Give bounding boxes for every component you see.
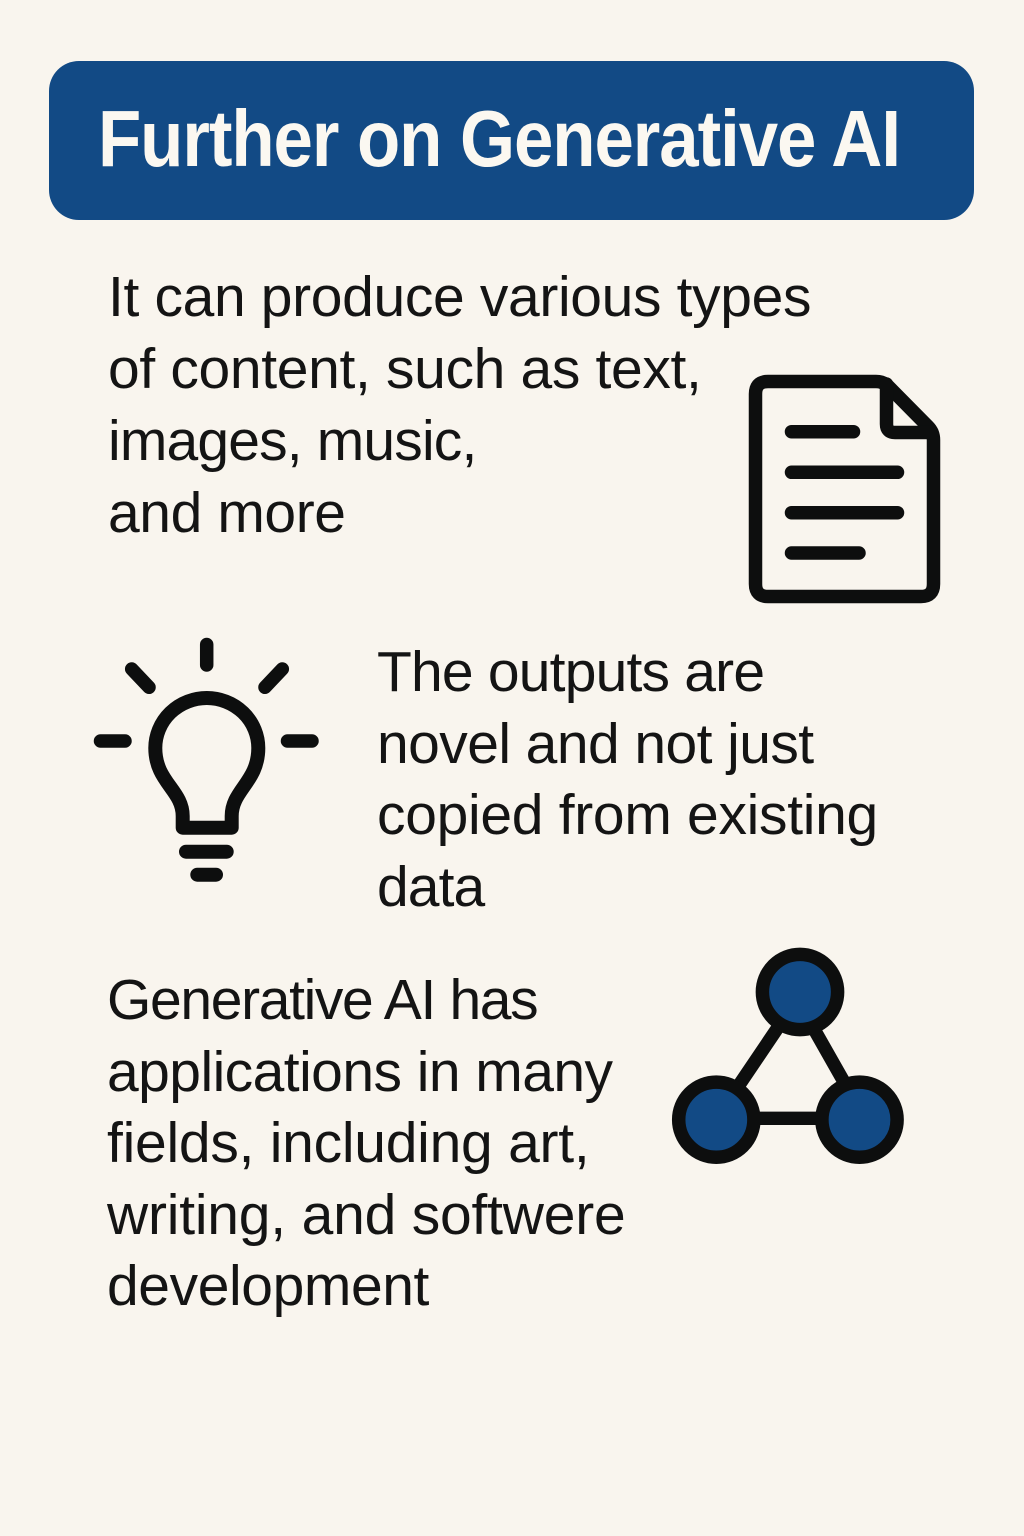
- text block: content types: and more: [108, 481, 346, 545]
- text block: novel outputs: copied from existing: [377, 783, 878, 847]
- icon: document: [748, 374, 940, 604]
- text block: applications: fields, including art,: [107, 1111, 589, 1175]
- text block: applications: applications in many: [107, 1040, 612, 1104]
- text block: applications: writing, and softwere: [107, 1182, 626, 1246]
- icon: light bulb: [94, 638, 319, 882]
- text block: content types: It can produce various types: [108, 264, 811, 328]
- text block: novel outputs: [377, 640, 878, 919]
- title banner: [49, 61, 974, 220]
- text block: applications: development: [107, 1254, 429, 1318]
- text block: content types: of content, such as text,: [108, 337, 702, 401]
- text block: novel outputs: The outputs are: [377, 640, 764, 704]
- icon: network triangle: [672, 948, 904, 1164]
- text block: applications: Generative AI has: [107, 968, 537, 1032]
- text block: novel outputs: novel and not just: [377, 712, 814, 776]
- text block: applications: [106, 968, 626, 1318]
- text block: novel outputs: data: [377, 855, 484, 919]
- text block: content types: images, music,: [108, 409, 476, 473]
- text block: content types: [108, 264, 811, 545]
- title: Further on Generative AI: [98, 94, 900, 183]
